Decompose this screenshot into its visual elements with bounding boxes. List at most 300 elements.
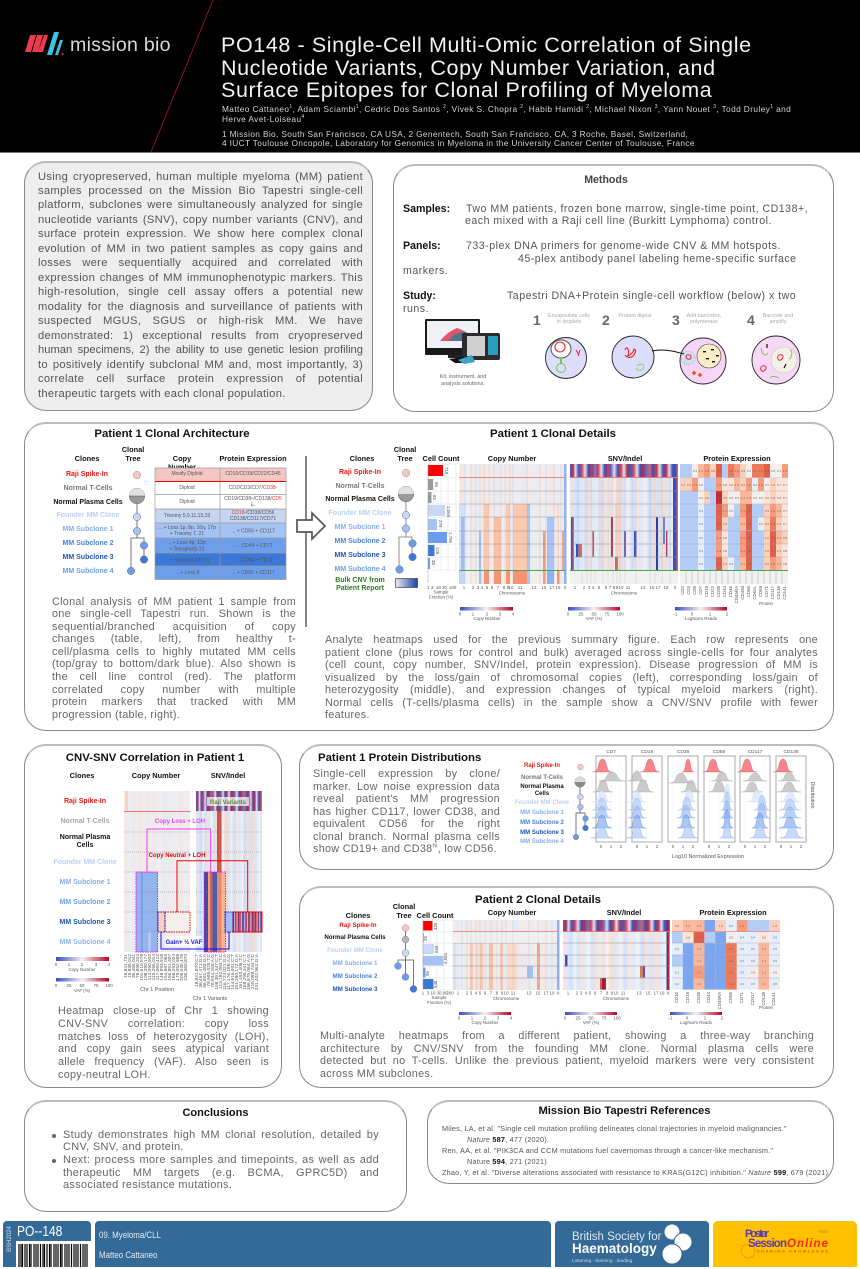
legend: log norm reads: [672, 607, 729, 621]
chart: cell count bars: 10: [436, 585, 441, 590]
heatmap: protein expression: 0.7: [783, 522, 787, 526]
heatmap: protein expression: 0.5: [729, 496, 733, 500]
heatmap: protein expression: 1.0: [773, 924, 777, 928]
logo: mission bio: mission bio: [70, 34, 171, 56]
step 2: Protein digest: [619, 313, 652, 319]
heatmap: copy number: 5: [479, 990, 482, 996]
heatmap: SNV/Indel: Chromosome: [603, 996, 630, 1001]
heatmap: protein expression: CD117: [750, 991, 755, 1005]
table: copy number and protein expression: CD19/CD38: [224, 496, 251, 502]
heatmap: protein expression: 0.7: [783, 496, 787, 500]
heatmap: SNV/Indel: 6: [594, 990, 597, 996]
author: Matteo Cattaneo: [99, 1250, 157, 1260]
legend: VAF: 0: [55, 983, 58, 988]
heatmap: protein expression: 0.4: [729, 924, 733, 928]
heatmap: protein expression: CD138: [761, 991, 766, 1006]
clone labels: MM Subclone 3: [332, 986, 378, 993]
text: architecture description: one single-cell Tapestri run. Shown is the: [52, 608, 296, 620]
heatmap: copy number: 15: [536, 990, 541, 996]
study text: Tapestri DNA+Protein single-cell workflow (below) x two: [507, 290, 796, 302]
chart: cell count bars: 128: [435, 547, 440, 555]
heatmap: protein expression: CD71: [764, 585, 769, 597]
heatmap: copy number: 11: [511, 990, 516, 996]
heatmap: copy number: 3: [477, 585, 480, 590]
text: distributions description: clonal branch. Normal plasma cells: [313, 831, 500, 843]
text: architecture description: correlated copy number with multiple: [52, 684, 296, 696]
legend: log norm reads: 0: [686, 1016, 689, 1020]
logo: mission bio: [25, 32, 171, 56]
heatmap: copy number: Chromosome: [493, 996, 520, 1001]
legend: VAF: VAF (%): [583, 1020, 600, 1025]
affiliations: 1 Mission Bio, South San Francisco, CA USA, 2 Genentech, South San Francisco, CA, 3 Roche, Basel, Switzerland,: [222, 129, 688, 139]
text: details description: heterozygosity (middle), and expression changes of typical myeloid markers (right).: [325, 684, 818, 696]
abstract text: high-resolution, single cell assay offers a potential new: [38, 286, 363, 298]
table: copy number and protein expression: CD10/CD19/CD22/CD45: [225, 471, 281, 477]
heatmap: SNV/Indel: 17: [656, 585, 661, 590]
legend: VAF: 25: [576, 1016, 581, 1020]
heatmap: copy number: 17: [550, 585, 555, 590]
clone labels: Normal T-Cells: [60, 818, 110, 825]
heatmap: copy number: 15: [542, 585, 547, 590]
heatmap: protein expression: 0.2: [675, 982, 679, 986]
column headers: SNV/Indel: [211, 771, 245, 780]
callout: raji variants: [207, 797, 249, 806]
heatmap: protein expression: 1.3: [741, 549, 745, 553]
step 1: Encapsulate cells: [548, 313, 590, 319]
divider between sections: [305, 456, 307, 627]
step 3: Add barcodes,: [687, 313, 722, 319]
heatmap: protein expression: 0.3: [753, 483, 757, 487]
diagonal red accent: [150, 0, 214, 152]
heatmap: SNV/Indel: 3: [580, 990, 583, 996]
legend: VAF: 50: [589, 1016, 594, 1020]
ridge plot: CD138: CD138: [784, 749, 799, 755]
heatmap: protein expression: 0.8: [777, 496, 781, 500]
heatmap: copy number: 6: [491, 585, 494, 590]
ridge plot: CD19: 0: [636, 844, 639, 849]
x labels: chr 1 variants: 78,934,250:A:G: [210, 954, 216, 988]
text: architecture description: (top/gray to bottom/dark blue). Also shown is: [52, 658, 296, 670]
x labels: chr 1 variants: 18,841,870:C:T: [194, 954, 200, 987]
heatmap: protein expression: 1.0: [719, 924, 723, 928]
text: details description: Normal cells (T-cells/plasma cells) in the sample show a CNV/SNV profile with fewer: [325, 696, 818, 708]
heatmap: protein expression: 1.0: [771, 496, 775, 500]
heatmap: protein expression: CD45RA: [734, 586, 739, 603]
clones column: Raji Spike-In: [66, 471, 108, 478]
heatmap: copy number: 19: [556, 585, 561, 590]
table: copy number and protein expression: + Trisomy 7, 21: [170, 531, 204, 537]
heatmap: protein expression: 1.4: [759, 483, 763, 487]
heatmap: SNV/Indel: 19: [660, 990, 665, 996]
footer: poster session online logo: Poster: [745, 1228, 770, 1240]
heatmap: protein expression: 1.4: [771, 562, 775, 566]
samples text: each mixed with a Raji cell line (Burkitt Lymphoma) control.: [465, 215, 772, 227]
clone labels: Normal T-Cells: [521, 775, 564, 781]
legend: log norm reads: 1: [704, 1016, 707, 1020]
details: clones column: MM Subclone 2: [335, 538, 386, 545]
ridge plot: CD7: CD7: [606, 749, 616, 755]
heatmap: protein expression: 1.3: [747, 483, 751, 487]
x labels: chr 1 variants: 168,296,341:C:T: [242, 954, 248, 990]
clonal tree: [393, 902, 417, 992]
footer: poster session online logo: [713, 1221, 857, 1267]
heatmap: protein expression: 1.4: [717, 536, 721, 540]
text: details description: (cell count, copy number, SNV/Indel, protein expression). Disease progression of MM is: [325, 659, 818, 671]
callout: copy neutral + LOH: Copy Neutral + LOH: [149, 853, 205, 859]
legend: VAF: 25: [579, 612, 584, 616]
x labels: chr 1 positions: 36,456,041: [131, 954, 137, 978]
x labels: chr 1 variants: 231,402,962:G:A: [254, 953, 260, 990]
heatmap: protein expression: 1.5: [729, 970, 733, 974]
heatmap: protein expression: 1.3: [717, 483, 721, 487]
references list: [442, 1124, 830, 1177]
ridge plot: CD7: 0: [600, 844, 603, 849]
heatmap: copy number: 2: [472, 585, 475, 590]
heatmap: protein expression: 0.9: [765, 562, 769, 566]
conclusions bullets: [63, 1128, 379, 1191]
ridge plot: CD56: [703, 749, 735, 849]
table: copy number and protein expression: + Tetraploidy 21: [169, 546, 205, 552]
legend: copy number: 4: [512, 612, 515, 616]
poster title: [221, 33, 752, 102]
heatmap: protein expression: 1.7: [771, 536, 775, 540]
heatmap: protein expression: 1.7: [747, 509, 751, 513]
legend: copy number: [458, 1012, 513, 1025]
details: clones column: Normal Plasma Cells: [325, 496, 395, 503]
heatmap: protein expression: 1.4: [705, 469, 709, 473]
chart: cell count bars: 30: [442, 585, 447, 590]
legend: VAF: 0: [567, 612, 570, 616]
text: details description: [325, 634, 818, 721]
heatmap: copy number: 4: [475, 990, 478, 996]
heatmap: protein expression: 0.4: [740, 936, 744, 940]
legend: VAF: VAF (%): [586, 616, 603, 621]
chart: cell count bars: 3: [427, 990, 430, 996]
heatmap: SNV/Indel: 5: [589, 990, 592, 996]
table: copy number and protein expression: Diploid: [179, 499, 195, 505]
legend: copy number: 2: [486, 612, 489, 616]
heatmap: protein expression: 0.6: [765, 496, 769, 500]
legend: copy number: 3: [497, 1016, 500, 1020]
text: patient 2 description: [320, 1030, 814, 1080]
clone labels: Clones: [346, 911, 370, 920]
bullet marks: [52, 1134, 56, 1163]
legend: log norm reads: LogNorm Reads: [680, 1020, 713, 1025]
chart: cell count bars: 80: [443, 990, 448, 996]
chart: cell count bars: 718: [444, 467, 449, 475]
heading: CNV-SNV Correlation in Patient 1: [66, 752, 245, 764]
clonal tree: Tree: [125, 454, 141, 463]
chart: cell count bars: 4,554: [443, 952, 448, 964]
heatmap: protein expression: CD2: [680, 585, 685, 595]
heatmap: protein expression: CD69: [758, 585, 763, 597]
conclusions bullets: therapeutic MM targets (e.g. BCMA, GPRC5D) and: [63, 1167, 379, 1179]
text: details description: visualized by the loss/gain of chromosomal copies (left), corresponding loss/gain of: [325, 672, 818, 684]
heatmap: copy number: 13: [532, 585, 537, 590]
table: copy number and protein expression: /CD138/: [253, 496, 272, 502]
ridge plot: CD38: 1: [682, 844, 685, 849]
clone labels: Raji Spike-In: [64, 798, 106, 805]
heatmap: protein expression: Protein Expression: [699, 908, 767, 917]
heatmap: protein expression: 1.1: [777, 562, 781, 566]
heatmap: SNV/Indel: 1: [567, 990, 570, 996]
heatmap: SNV/Indel: 10: [619, 585, 624, 590]
x labels: chr 1 variants: 113,182,063:T:C: [218, 953, 224, 989]
ridge plot: CD56: 1: [718, 844, 721, 849]
category: 09. Myeloma/CLL: [99, 1230, 161, 1240]
heatmap: protein expression: CD56: [746, 585, 751, 597]
chart: cell count bars: Sample: [432, 995, 447, 1000]
abstract text: to positively identify subclonal MM and, most importantly, 3): [38, 359, 363, 371]
heatmap: protein expression: [672, 908, 780, 1010]
heatmap: protein expression: CD3: [686, 585, 691, 595]
chart: cell count bars: Sample: [434, 590, 449, 594]
x labels: chr 1 variants: 161,493,406:T:C: [238, 953, 244, 989]
x labels: chr 1 variants: 78,905,025:T:C: [206, 953, 212, 987]
clone labels: Founder MM Clone: [327, 947, 383, 954]
callout: copy neutral + LOH: [149, 853, 262, 932]
heatmap: protein expression: 0.8: [783, 562, 787, 566]
heatmap: SNV/Indel: 4: [585, 990, 588, 996]
clone labels: MM Subclone 1: [332, 960, 378, 967]
heatmap: protein expression: CD22: [710, 585, 715, 597]
heatmap: protein expression: 1.6: [729, 469, 733, 473]
panel: references: [427, 1100, 834, 1184]
heatmap: SNV/Indel: SNV/Indel: [608, 454, 642, 463]
heatmap: protein expression: 0.5: [773, 982, 777, 986]
abstract text: nucleotide variants (SNV), copy number variants (CNV), and: [38, 214, 363, 226]
heatmap: protein expression: 0.4: [699, 483, 703, 487]
clonal tree: [573, 764, 588, 840]
samples text: Samples:: [403, 203, 450, 215]
ridge plot: CD138: [773, 749, 806, 849]
heatmap: protein expression: 0.8: [723, 549, 727, 553]
x labels: chr 1 positions: 148,993,918: [159, 954, 165, 981]
heatmap: protein expression: 0.4: [693, 469, 697, 473]
legend: copy number: 4: [510, 1016, 513, 1020]
chart: cell count bars: [417, 911, 454, 1005]
heatmap: protein expression: 0.8: [723, 483, 727, 487]
heatmap: copy number: X: [564, 585, 567, 590]
legend: copy number: Copy Number: [471, 1020, 499, 1025]
heatmap: protein expression: 0.7: [783, 509, 787, 513]
legend: copy number: 1: [471, 1016, 474, 1020]
heatmap: protein expression: 0.3: [699, 536, 703, 540]
heatmap: protein expression: 1.3: [735, 469, 739, 473]
text: distributions description: marker. Low noise expression data: [313, 781, 500, 793]
heatmap: SNV/Indel: [563, 908, 670, 1001]
x labels: chr 1 variants: 117,176,186:A:G: [226, 954, 232, 990]
step 3: polymerase: [690, 319, 718, 325]
clonal tree: [122, 445, 148, 575]
poster title: PO148 - Single-Cell Multi-Omic Correlation of Single: [221, 33, 752, 57]
chart: cell count bars: 82: [432, 495, 437, 500]
legend: log norm reads: 2: [721, 1016, 724, 1020]
panels text: markers.: [403, 265, 448, 277]
heatmap: SNV/Indel: 9: [616, 585, 619, 590]
x labels: chr 1 variants: 144,616,901:C:T: [230, 954, 236, 990]
samples text: Two MM patients, frozen bone marrow, single-time point, CD138+,: [466, 203, 808, 215]
abstract text: suspected MGUS, SGUS or high-risk MM. We have: [38, 315, 363, 327]
heatmap: SNV/Indel: 2: [576, 990, 579, 996]
text: architecture description: protein markers that tracked with MM: [52, 696, 296, 708]
clones column: [53, 454, 123, 575]
heatmap: protein expression: 0.8: [723, 536, 727, 540]
legend: VAF: [55, 978, 113, 993]
x labels: chr 1 variants: [194, 953, 260, 990]
panel: patient 2 clonal details: [299, 886, 834, 1088]
abstract text: human specimens, 2) the ability to use genetic lesion profiling: [38, 344, 363, 356]
text: architecture description: the cell line control (red). The platform: [52, 671, 296, 683]
legend: log norm reads: 0: [691, 612, 694, 616]
clonal tree: Clonal: [393, 902, 415, 911]
x labels: chr 1 positions: 16,841,731: [123, 954, 129, 978]
samples text: [403, 203, 808, 227]
legend: log norm reads: LogNorm Reads: [685, 616, 718, 621]
legend: VAF: 50: [80, 983, 85, 988]
x labels: chr 1 positions: 154,987,063: [163, 954, 169, 981]
heading: Patient 2 Clonal Details: [475, 894, 601, 906]
text: patient 2 description: architecture by CNV/SNV from the founding MM clone. Normal plasma cells were: [320, 1043, 814, 1055]
heading: patient 1 clonal details: Patient 1 Clonal Details: [490, 428, 616, 440]
legend: log norm reads: 1: [709, 612, 712, 616]
clone labels: MM Subclone 1: [520, 810, 564, 816]
ridge plot: CD7: 2: [620, 844, 623, 849]
clone labels: [54, 798, 117, 946]
heatmap: protein expression: 0.9: [765, 522, 769, 526]
ridge plot: CD56: CD56: [713, 749, 725, 755]
table: copy number and protein expression: 6-: [251, 502, 256, 508]
heatmap: copy number: 9: [507, 585, 510, 590]
heatmap: protein expression: 0.9: [783, 536, 787, 540]
heatmap: protein expression: 0.9: [675, 924, 679, 928]
clone labels: MM Subclone 1: [60, 879, 111, 886]
clone labels: MM Subclone 3: [520, 830, 564, 836]
copy number close-up heatmap: [124, 791, 190, 952]
heatmap: protein expression: 1.7: [717, 509, 721, 513]
heatmap: protein expression: 0.4: [740, 959, 744, 963]
heatmap: SNV/Indel: [570, 454, 678, 596]
footer: british society for haematology logo: British Society for: [572, 1231, 662, 1243]
table: copy number and protein expression: Trisomy 5,9,11,15,19: [164, 513, 210, 519]
chart: cell count bars: 96: [425, 971, 430, 976]
heatmap: protein expression: 1.8: [747, 536, 751, 540]
legend: VAF: [567, 607, 624, 621]
text: correlation description: [58, 1005, 269, 1081]
heatmap: protein expression: 0.4: [740, 947, 744, 951]
heatmap: SNV/Indel: X: [667, 990, 670, 996]
heatmap: protein expression: 1.4: [771, 509, 775, 513]
ridge plot: CD19: CD19: [641, 749, 653, 755]
heatmap: protein expression: 0.5: [773, 959, 777, 963]
heatmap: protein expression: 1.2: [697, 959, 701, 963]
heatmap: copy number: 9: [501, 990, 504, 996]
heatmap: protein expression: 0.8: [783, 549, 787, 553]
abstract text: evolution of MM in two patient samples as copy gains and: [38, 243, 363, 255]
heatmap: SNV/Indel: 13: [641, 585, 646, 590]
x labels: chr 1 positions: [123, 954, 189, 981]
heatmap: copy number: [453, 908, 560, 1001]
heatmap: SNV/Indel: Chromosome: [611, 590, 638, 596]
ridge plot: CD38: 2: [692, 844, 695, 849]
text: correlation description: matches loss of heterozygosity (LOH),: [58, 1031, 269, 1043]
heatmap: protein expression: 1.7: [717, 522, 721, 526]
x labels: chr 1 positions: 205,035,478: [179, 954, 185, 981]
heatmap: copy number: 3: [470, 990, 473, 996]
text: details description: patient clone (plus rows for control and bulk) averaged across single-cells for four analytes: [325, 646, 818, 658]
clone labels: MM Subclone 4: [520, 839, 564, 845]
clones column: MM Subclone 3: [63, 554, 114, 561]
footer: poster session online logo: Session: [748, 1238, 787, 1250]
authors: Matteo Cattaneo1, Adam Sciambi1, Cedric Dos Santos 2, Vivek S. Chopra 2, Habib Hamidi 2, Michael Nixon 3, Yann Nouet 3, Todd Druley1 and: [222, 104, 791, 114]
table: copy number and protein expression: CD138/CD117/CD71: [230, 516, 276, 522]
heatmap: SNV/Indel: 11: [626, 585, 631, 590]
heatmap: protein expression: 1.0: [723, 522, 727, 526]
text: distributions description: equivalent CD56 for the right: [313, 818, 500, 830]
heatmap: copy number: 7: [497, 585, 500, 590]
heatmap: protein expression: 0.5: [751, 982, 755, 986]
heatmap: protein expression: CD141: [771, 991, 776, 1006]
heatmap: protein expression: 0.3: [729, 562, 733, 566]
heatmap: protein expression: 1.1: [762, 970, 766, 974]
panel: CNV-SNV correlation: [24, 744, 282, 1088]
panel: patient 1 protein distributions: [299, 744, 834, 870]
details: clonal tree: Clonal: [394, 445, 416, 454]
heatmap: protein expression: 0.9: [741, 483, 745, 487]
details: clonal tree: [394, 445, 418, 588]
panel: conclusions: [24, 1100, 407, 1212]
chart: cell count bars: 100: [449, 585, 457, 590]
heatmap: SNV/Indel: 15: [650, 585, 655, 590]
heatmap: protein expression: 0.5: [729, 509, 733, 513]
table: copy number and protein expression: hi: [251, 496, 254, 500]
poster title: Nucleotide Variants, Copy Number Variation, and: [221, 56, 716, 80]
x labels: chr 1 positions: 115,256,014: [151, 954, 157, 980]
legend: VAF: 75: [602, 1016, 607, 1020]
text: architecture description: sequential/branched acquisition of copy: [52, 621, 296, 633]
authors: Herve Avet-Loiseau4: [222, 114, 305, 124]
table: copy number and protein expression: Diploid: [179, 485, 195, 491]
abstract text: samples processed on the Mission Bio Tapestri single-cell: [38, 185, 363, 197]
details: clones column: Bulk CNV from: [335, 577, 385, 584]
heatmap: protein expression: 1.0: [723, 562, 727, 566]
heatmap: SNV/Indel: 8: [606, 990, 609, 996]
legend: VAF: 100: [616, 612, 624, 616]
heatmap: protein expression: 0.3: [699, 549, 703, 553]
clone labels: Founder MM Clone: [54, 859, 117, 866]
table: copy number and protein expression: ... + CD56 + CD117: [231, 528, 275, 534]
heatmap: protein expression: 1.6: [759, 469, 763, 473]
heatmap: protein expression: 1.7: [697, 936, 701, 940]
chart: cell count bars: 1: [427, 585, 430, 590]
heatmap: copy number: 1: [457, 990, 460, 996]
clone labels: [324, 911, 386, 993]
footer: poster session online logo: Online: [787, 1238, 829, 1250]
footer: poster id with barcode: [3, 1221, 91, 1267]
text: architecture description: changes (table, left), from healthy t-: [52, 633, 296, 645]
table: copy number and protein expression: ... + Loss 4p, 12p;: [167, 540, 207, 546]
heatmap: SNV/Indel: 17: [654, 990, 659, 996]
legend: VAF: 75: [94, 983, 99, 988]
heatmap: protein expression: 1.3: [741, 536, 745, 540]
panel: methods: [393, 164, 834, 412]
heatmap: protein expression: 1.5: [729, 947, 733, 951]
heatmap: copy number: 8: [496, 990, 499, 996]
chart: cell count bars: 200: [446, 990, 454, 996]
text: correlation description: allele frequency (VAF). Also seen is: [58, 1056, 269, 1068]
table: copy number and protein expression: Number: [168, 462, 196, 472]
study text: runs.: [403, 303, 429, 315]
